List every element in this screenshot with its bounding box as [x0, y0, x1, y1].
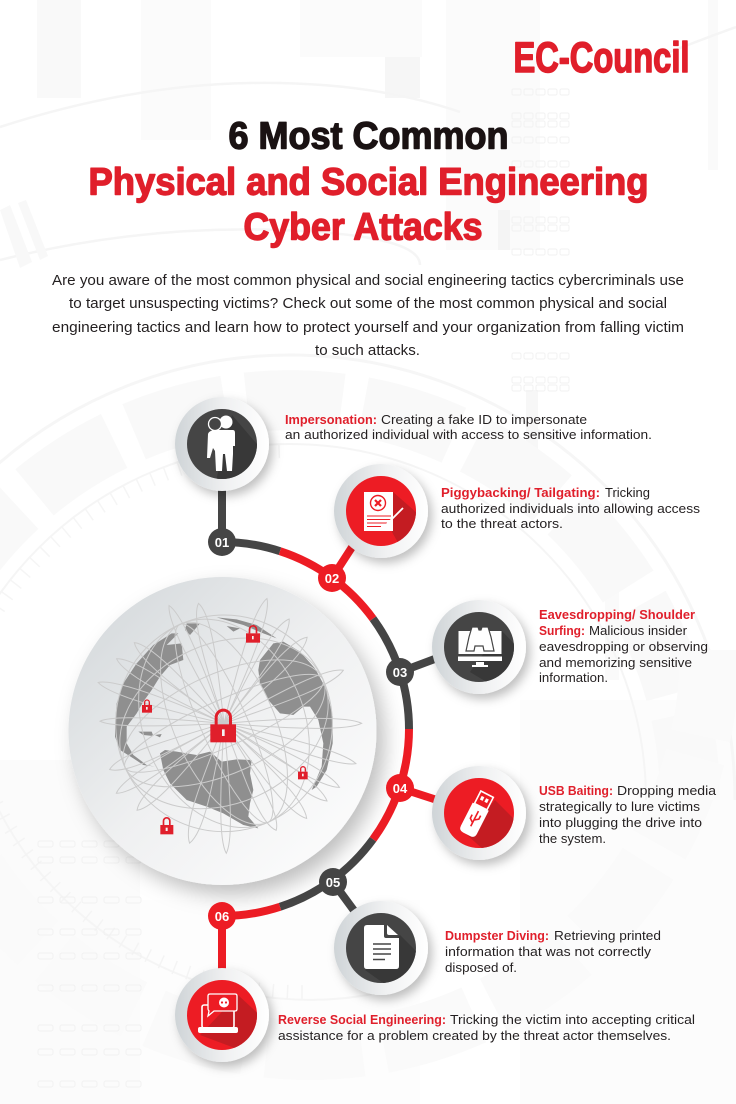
- node 02: [318, 564, 346, 592]
- text: USB baiting: [539, 783, 717, 846]
- text: eavesdropping: and memorizing sensitive: [539, 655, 692, 670]
- text: impersonation: Impersonation:: [285, 412, 377, 427]
- icon: impersonator with mask: [175, 397, 269, 491]
- text: dumpster diving: [445, 928, 661, 975]
- globe with network and locks: [92, 592, 362, 855]
- text: impersonation: [285, 412, 652, 442]
- text: reverse social engineering: [278, 1012, 695, 1043]
- text: eavesdropping: Eavesdropping/ Shoulder: [539, 607, 695, 622]
- text: dumpster diving: disposed of.: [445, 960, 517, 975]
- node 06: 06: [215, 909, 229, 924]
- node 04: [386, 774, 414, 802]
- globe plate: [68, 577, 376, 885]
- text: dumpster diving: Retrieving printed: [554, 928, 661, 943]
- text: piggybacking: Piggybacking/ Tailgating:: [441, 485, 600, 500]
- icon: laptop with chat bubble: [175, 968, 269, 1062]
- intro paragraph: engineering tactics and learn how to protect yourself and your organization from falling victim: [52, 320, 684, 336]
- panel: item 4 USB baiting: [432, 766, 717, 860]
- lock: centre: [210, 709, 236, 742]
- continents: [115, 617, 333, 828]
- network wires: [92, 592, 362, 855]
- icon: USB drive: [432, 766, 526, 860]
- node 01: 01: [215, 535, 229, 550]
- text: piggybacking: [441, 485, 701, 531]
- node 04: 04: [393, 781, 408, 796]
- text: eavesdropping: eavesdropping or observing: [539, 639, 708, 654]
- title: Physical and Social Engineering: [88, 162, 648, 204]
- panel: item 1 impersonation: [175, 397, 652, 491]
- text: piggybacking: Tricking: [605, 485, 650, 500]
- lock: bottom: [160, 817, 173, 834]
- node 03: [386, 658, 414, 686]
- text: impersonation: an authorized individual with access to sensitive information.: [285, 427, 652, 442]
- lock: left: [142, 699, 152, 713]
- icon: monitor with binoculars: [432, 600, 526, 694]
- intro paragraph: [52, 273, 684, 359]
- lock: top: [246, 625, 260, 643]
- panel: item 5 dumpster diving: [334, 901, 661, 995]
- lock: right: [298, 766, 308, 779]
- icon: rejected document and pen: [334, 464, 428, 558]
- title: Cyber Attacks: [244, 206, 482, 248]
- panel: item 6 reverse social engineering: [175, 968, 695, 1062]
- node 05: 05: [326, 875, 340, 890]
- node 01: [208, 528, 236, 556]
- timeline arc and connectors: [222, 485, 440, 975]
- text: reverse social engineering: Reverse Social Engineering:: [278, 1012, 446, 1027]
- text: eavesdropping: Surfing:: [539, 623, 585, 638]
- text: dumpster diving: Dumpster Diving:: [445, 928, 549, 943]
- text: dumpster diving: information that was not correctly: [445, 944, 652, 959]
- intro paragraph: to such attacks.: [315, 343, 420, 359]
- text: USB baiting: USB Baiting:: [539, 783, 613, 798]
- text: USB baiting: into plugging the drive into: [539, 815, 702, 830]
- intro paragraph: Are you aware of the most common physical and social engineering tactics cybercriminals use: [52, 273, 684, 289]
- node 05: [319, 868, 347, 896]
- text: impersonation: Creating a fake ID to impersonate: [381, 412, 587, 427]
- icon: document: [334, 901, 428, 995]
- text: eavesdropping: information.: [539, 670, 608, 685]
- title: [88, 116, 648, 248]
- text: USB baiting: the system.: [539, 831, 606, 846]
- text: USB baiting: strategically to lure victims: [539, 799, 701, 814]
- text: reverse social engineering: Tricking the victim into accepting critical: [450, 1012, 695, 1027]
- title: 6 Most Common: [228, 116, 508, 158]
- node 03: 03: [393, 665, 407, 680]
- node 02: 02: [325, 571, 339, 586]
- panel: item 3 eavesdropping: [432, 600, 708, 694]
- text: piggybacking: to the threat actors.: [441, 516, 563, 531]
- node 06: [208, 902, 236, 930]
- text: eavesdropping: [539, 607, 708, 685]
- intro paragraph: to target unsuspecting victims? Check out some of the most common physical and social: [69, 296, 667, 312]
- text: USB baiting: Dropping media: [617, 783, 717, 798]
- text: reverse social engineering: assistance for a problem created by the threat actor themselves.: [278, 1028, 671, 1043]
- text: piggybacking: authorized individuals into allowing access: [441, 501, 701, 516]
- panel: item 2 piggybacking: [334, 464, 701, 558]
- text: eavesdropping: Malicious insider: [589, 623, 688, 638]
